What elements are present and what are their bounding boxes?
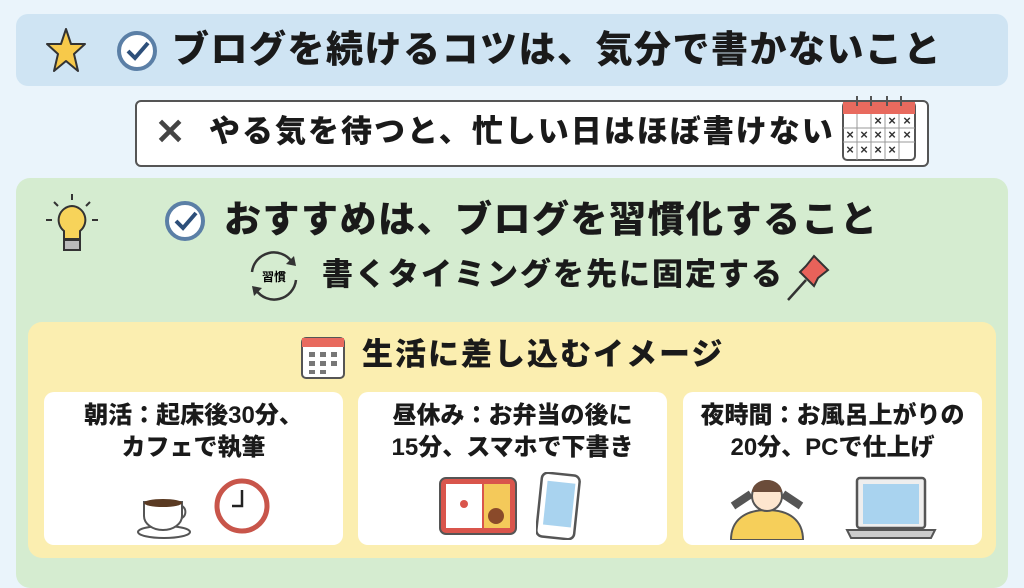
panel: warning box [135,100,929,167]
card: morning: 朝活：起床後30分、 [84,402,303,429]
icon: bento [439,477,517,535]
icon: calendar with x marks: × [888,142,896,157]
icon: calendar with x marks: × [846,127,854,142]
icon: star [46,28,86,72]
icon: relaxing person [730,480,804,540]
icon: calendar with x marks: × [874,127,882,142]
icon: smartphone [536,472,581,540]
card: night: 20分、PCで仕上げ [730,434,935,461]
subheading: 書くタイミングを先に固定する [322,257,784,292]
card: lunch [358,392,667,545]
icon: clock [214,478,270,534]
icon: calendar with x marks: × [874,142,882,157]
icon: habit cycle [250,251,298,301]
card: night [683,392,982,545]
card: lunch: 15分、スマホで下書き [392,434,633,461]
panel: top banner [16,14,1008,86]
title: ブログを続けるコツは、気分で書かないこと [172,29,942,70]
icon: calendar with x marks: × [903,113,911,128]
icon: check [117,31,157,71]
icon: x: ✕ [155,111,185,152]
card: lunch: 昼休み：お弁当の後に [392,402,632,429]
icon: lightbulb [46,194,98,251]
icon: calendar with x marks: × [846,142,854,157]
heading: おすすめは、ブログを習慣化すること [224,199,878,240]
icon: calendar [301,337,345,379]
card: morning [44,392,343,545]
icon: calendar with x marks: × [860,142,868,157]
heading: 生活に差し込むイメージ [362,337,724,372]
icon: laptop [846,476,936,539]
text: warning: やる気を待つと、忙しい日はほぼ書けない [209,114,835,149]
icon: calendar with x marks: × [874,113,882,128]
icon: coffee [137,499,191,539]
icon: calendar with x marks: × [860,127,868,142]
card: morning: カフェで執筆 [122,434,266,461]
icon: calendar with x marks: × [888,127,896,142]
panel: recommendation [16,178,1008,588]
panel: daily life image [28,322,996,558]
card: night: 夜時間：お風呂上がりの [700,402,964,429]
icon: calendar with x marks: × [903,127,911,142]
icon: check [165,201,205,241]
icon: habit cycle: 習慣 [262,268,286,285]
icon: calendar with x marks: × [888,113,896,128]
icon: calendar with x marks [842,96,916,161]
icon: pushpin [787,254,830,301]
